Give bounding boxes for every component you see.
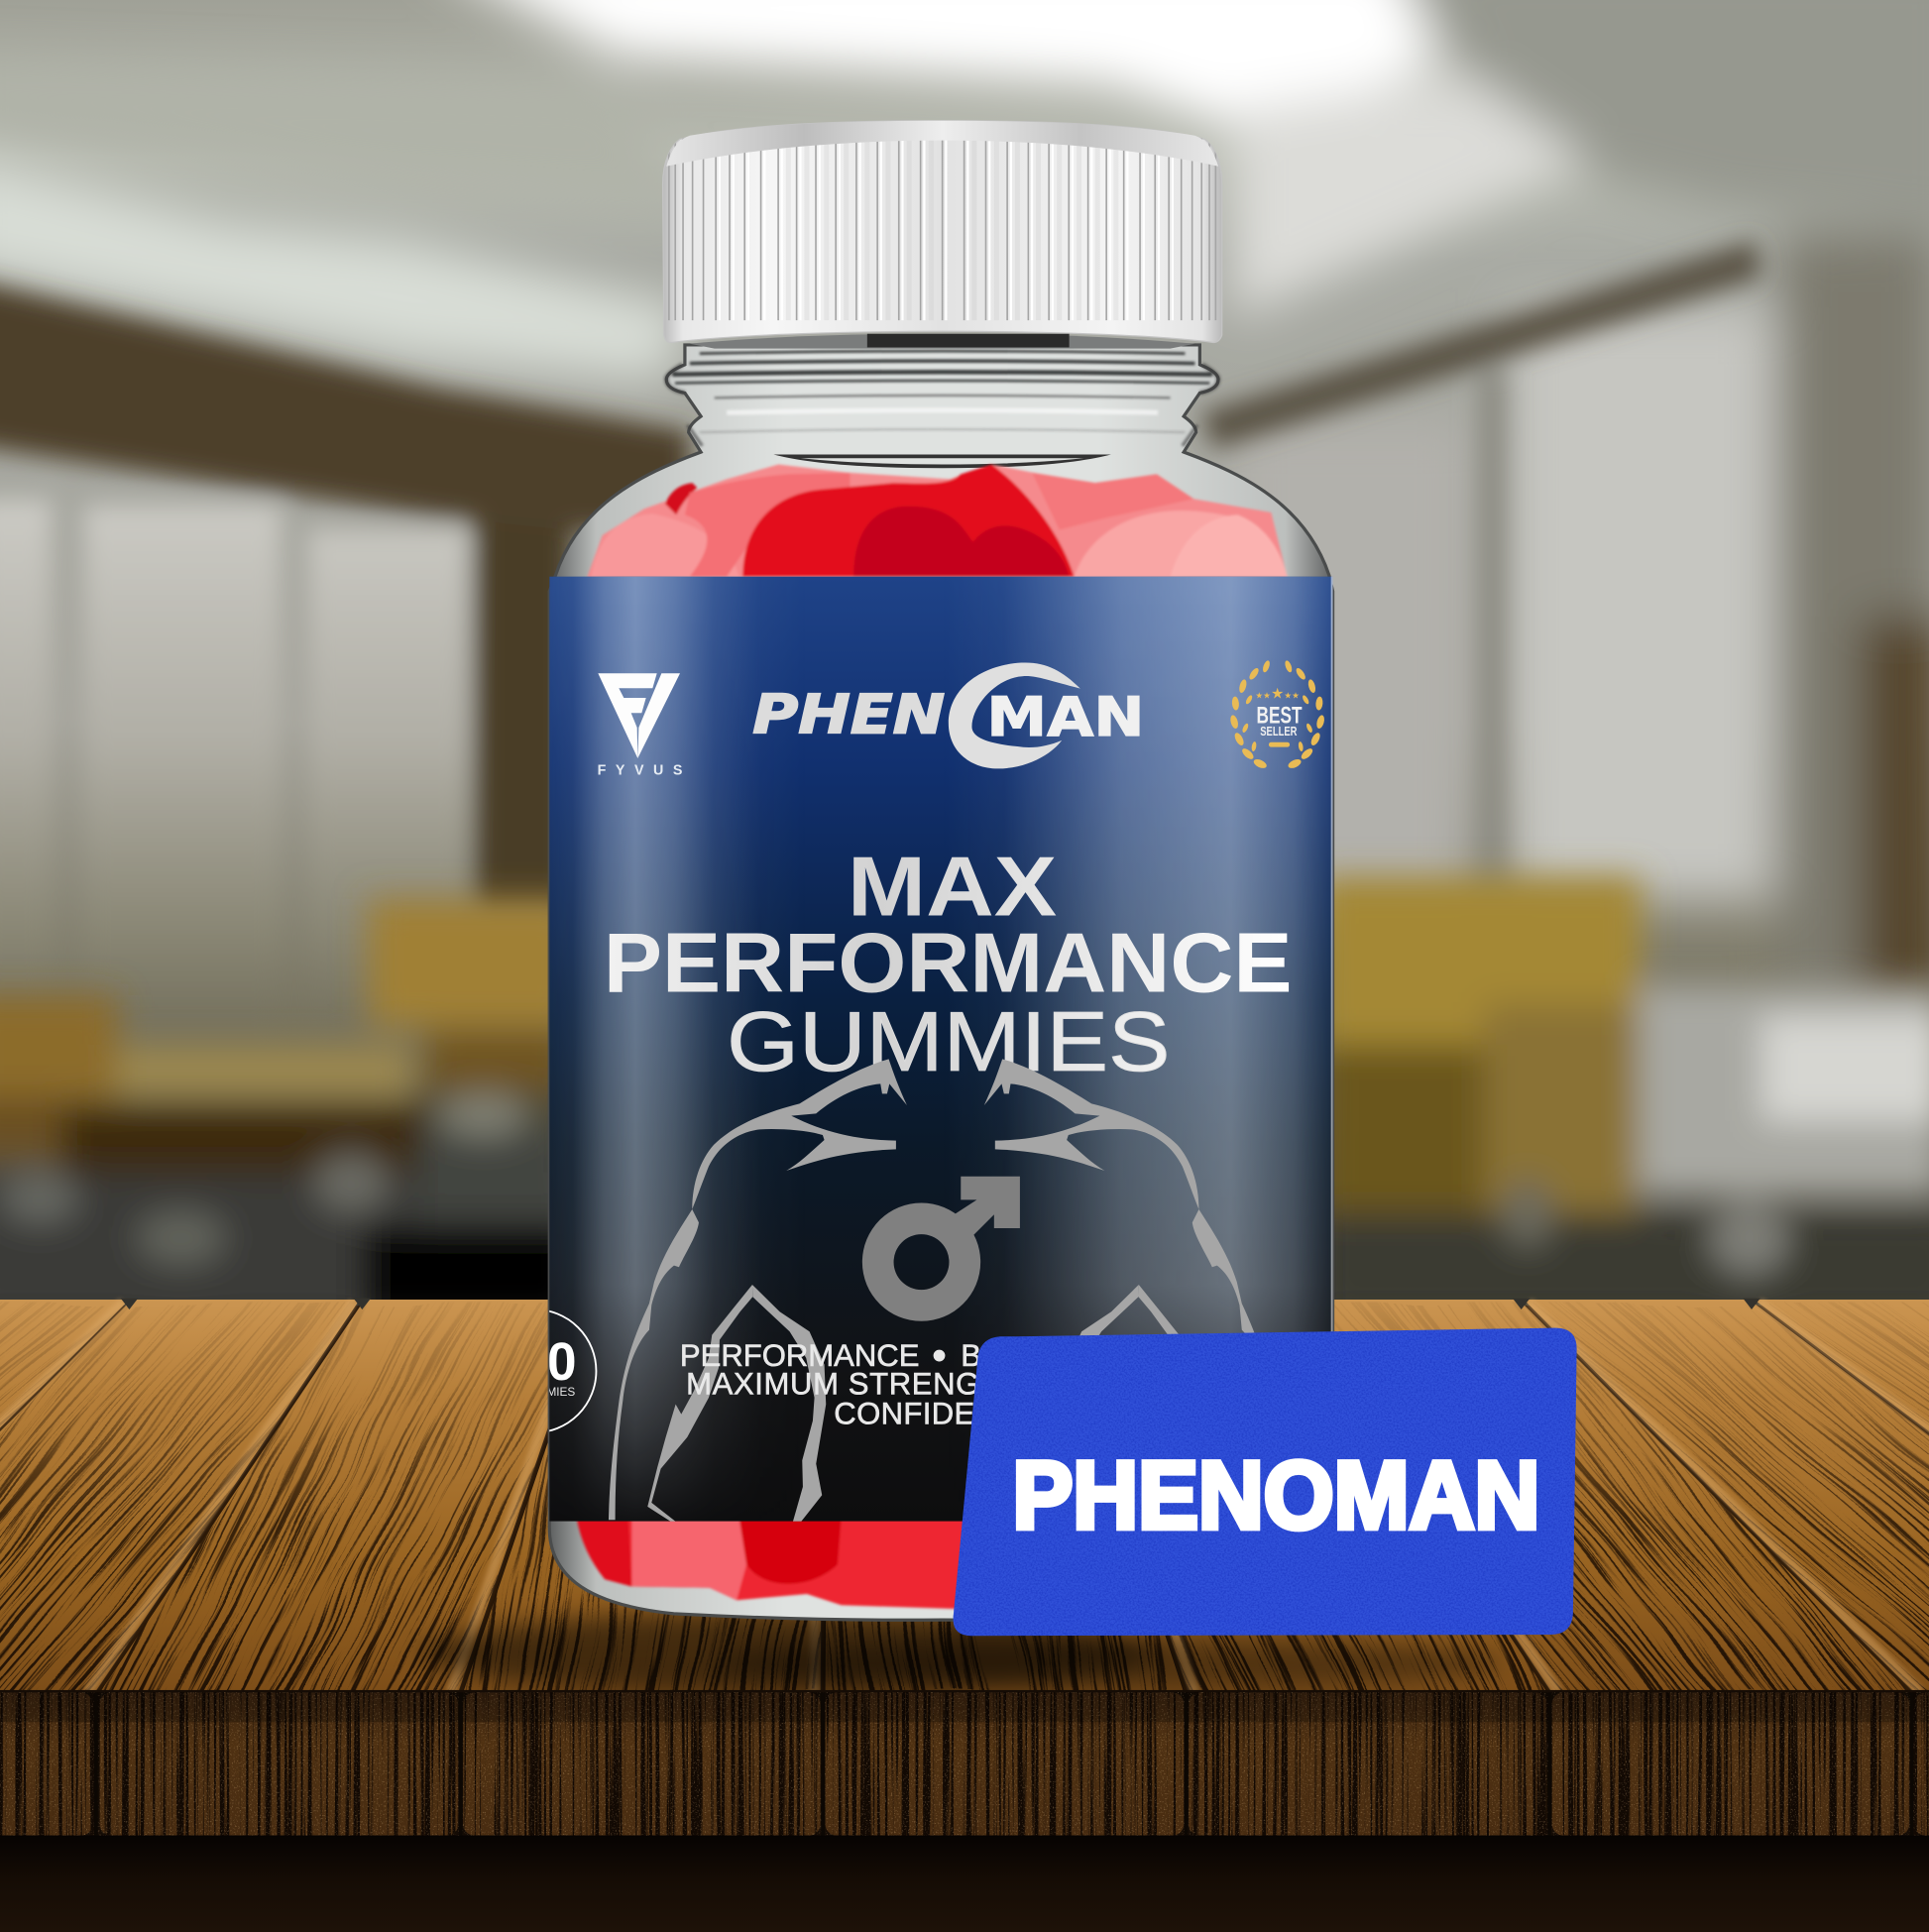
icon: male symbol [862,1177,1020,1321]
bottle [473,121,1333,1620]
bottle shadow on table [419,1611,1503,1695]
benefit text: MAXIMUM STRENGTH [686,1367,1023,1402]
benefit text: BOOST [961,1338,1069,1373]
glass body [549,345,1333,1620]
product title: PERFORMANCE [604,915,1293,1010]
neck threads [666,351,1218,446]
benefit text [680,1338,1069,1431]
benefit text: CONFIDENCE [834,1397,1041,1431]
cap rim [666,121,1218,167]
icon: laurel [1284,659,1325,770]
count badge: GUMMIES [519,1385,575,1399]
wooden table [0,1299,1929,1932]
neck shadow under cap [690,334,1194,349]
table top planks [0,1300,1929,1695]
cap [663,121,1222,349]
PHENOMAN blue card [949,1324,1583,1640]
label [473,577,1333,1522]
product title: GUMMIES [727,994,1171,1089]
benefit text: PERFORMANCE [680,1338,919,1373]
count badge: 30 [517,1333,577,1392]
brand logo: PHENOMAN: PHEN [752,682,945,745]
cap ribs [669,138,1215,320]
wood grain [0,1302,1929,1694]
product title [604,839,1293,1089]
best seller badge: ★★★★★ [1255,685,1300,703]
dark base below table [0,1836,1929,1932]
product title: MAX [848,839,1057,934]
plank seams [0,1299,1929,1692]
card wordmark: PHENOMAN [1012,1441,1539,1549]
table front face [0,1690,1929,1838]
label background [549,577,1333,1522]
gummies bottom [577,1518,973,1609]
icon: FYVUS logo: FYVUS [598,763,682,779]
brand logo: PHENOMAN: MAN [986,685,1144,748]
blurred interior background [0,0,1929,1320]
best seller badge [1229,659,1325,770]
count badge [473,1309,596,1432]
gummies top [587,464,1288,577]
shoulder inner lip [773,455,1111,468]
icon: FYVUS logo [598,673,682,779]
brand logo: PHENOMAN [752,662,1144,768]
best seller badge: SELLER [1260,724,1298,739]
muscular torso outline [609,1059,1283,1522]
best seller badge: BEST [1257,703,1303,729]
